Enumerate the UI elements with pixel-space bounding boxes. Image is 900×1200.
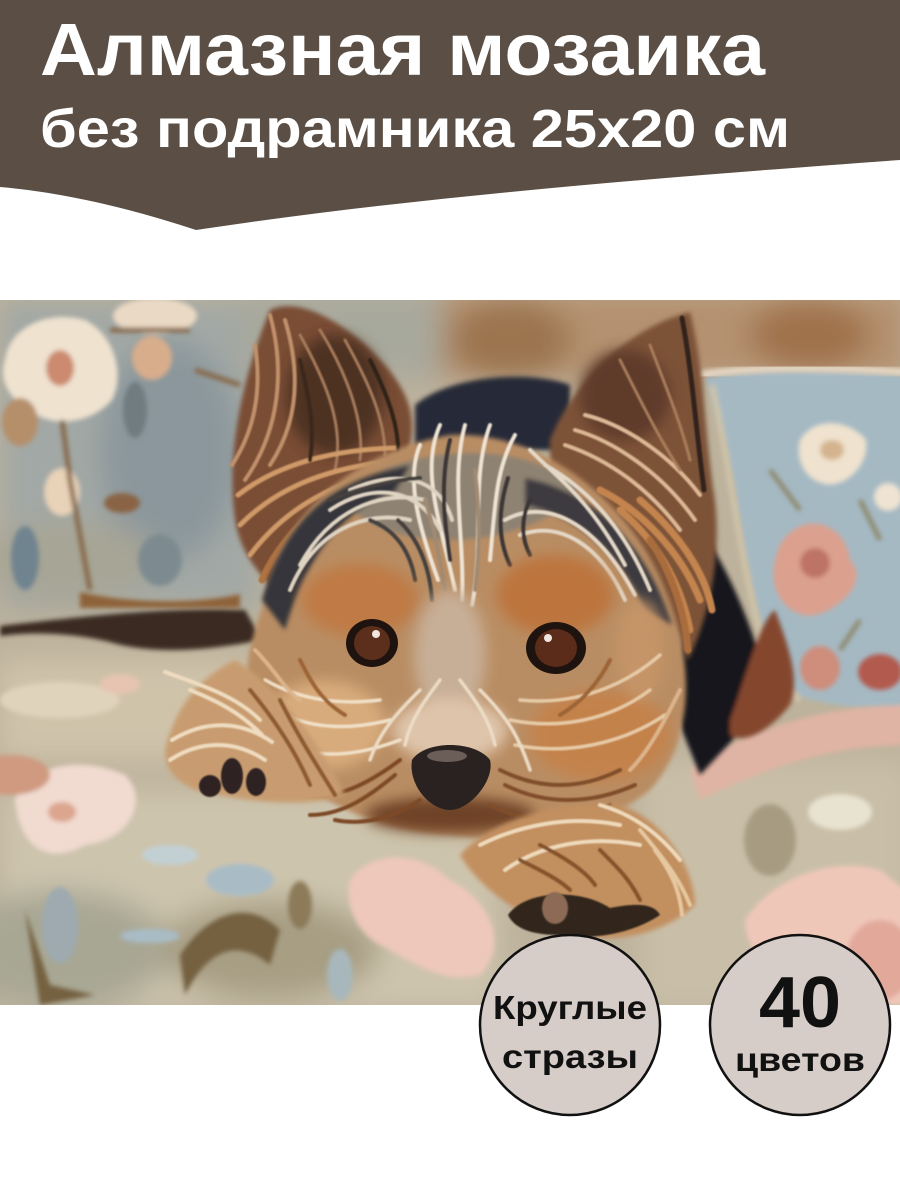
badge: round rhinestones: Круглые bbox=[493, 989, 647, 1026]
painting background bbox=[0, 290, 900, 1010]
header banner bbox=[0, 0, 900, 230]
badge: 40 colours bbox=[710, 935, 890, 1115]
painting: yorkshire terrier on floral cushions bbox=[0, 290, 900, 1010]
title: Алмазная мозаика bbox=[40, 8, 766, 91]
silver fur strands bbox=[290, 425, 650, 605]
left ear bbox=[232, 306, 412, 590]
badge: 40 colours: 40 bbox=[759, 963, 841, 1043]
right ear bbox=[550, 312, 717, 660]
subtitle: без подрамника 25х20 см bbox=[40, 99, 790, 159]
brow and cheek tan patches bbox=[265, 555, 670, 833]
right eye bbox=[526, 622, 586, 674]
muzzle fur strands bbox=[255, 650, 680, 822]
right floral pillow bbox=[700, 368, 900, 712]
floral flowers upper left bbox=[2, 298, 240, 608]
nose bbox=[412, 745, 491, 810]
claws bbox=[199, 758, 266, 797]
dark body behind the dog bbox=[415, 377, 794, 775]
lower cushion florals bbox=[0, 674, 900, 1005]
badge: round rhinestones: стразы bbox=[502, 1038, 638, 1075]
dog head bbox=[246, 425, 686, 838]
badge: round rhinestones bbox=[480, 935, 660, 1115]
pillow roses bbox=[770, 423, 900, 690]
badge: 40 colours: цветов bbox=[735, 1041, 865, 1078]
left eye bbox=[346, 619, 398, 667]
head top dark and silver fur bbox=[262, 453, 672, 630]
left paw bbox=[165, 660, 345, 803]
dark gap under back cushion bbox=[0, 609, 262, 650]
right paw bbox=[460, 804, 695, 938]
